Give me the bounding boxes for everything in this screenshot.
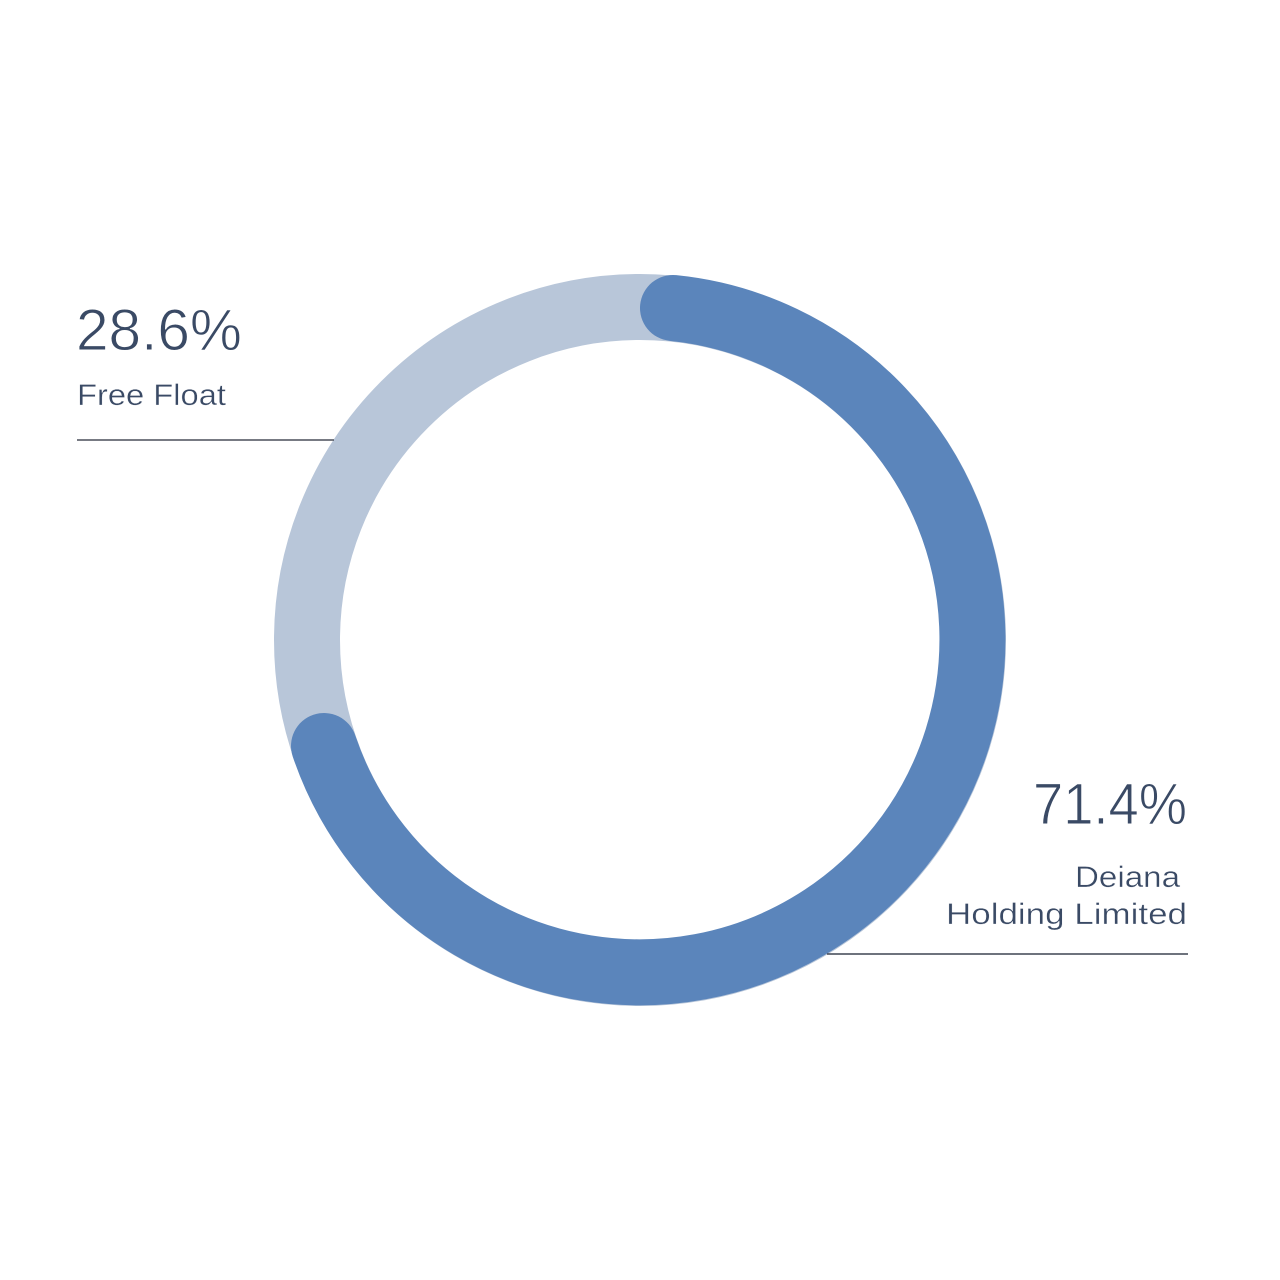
value: 28.6%: 28.6%	[76, 298, 242, 363]
label: Deiana Holding Limited: Holding Limited	[946, 898, 1187, 931]
label: Deiana Holding Limited	[946, 861, 1187, 931]
donut track: free float 28.6%	[307, 307, 973, 973]
leader line: Deiana Holding Limited	[827, 953, 1188, 955]
value: 71.4%: 71.4%	[1033, 772, 1187, 837]
label: Free Float: Free Float	[77, 379, 227, 412]
donut arc: Deiana Holding Limited 71.4%	[324, 308, 972, 972]
leader line: free float	[77, 439, 334, 441]
label: Deiana Holding Limited: Deiana	[1075, 861, 1180, 894]
